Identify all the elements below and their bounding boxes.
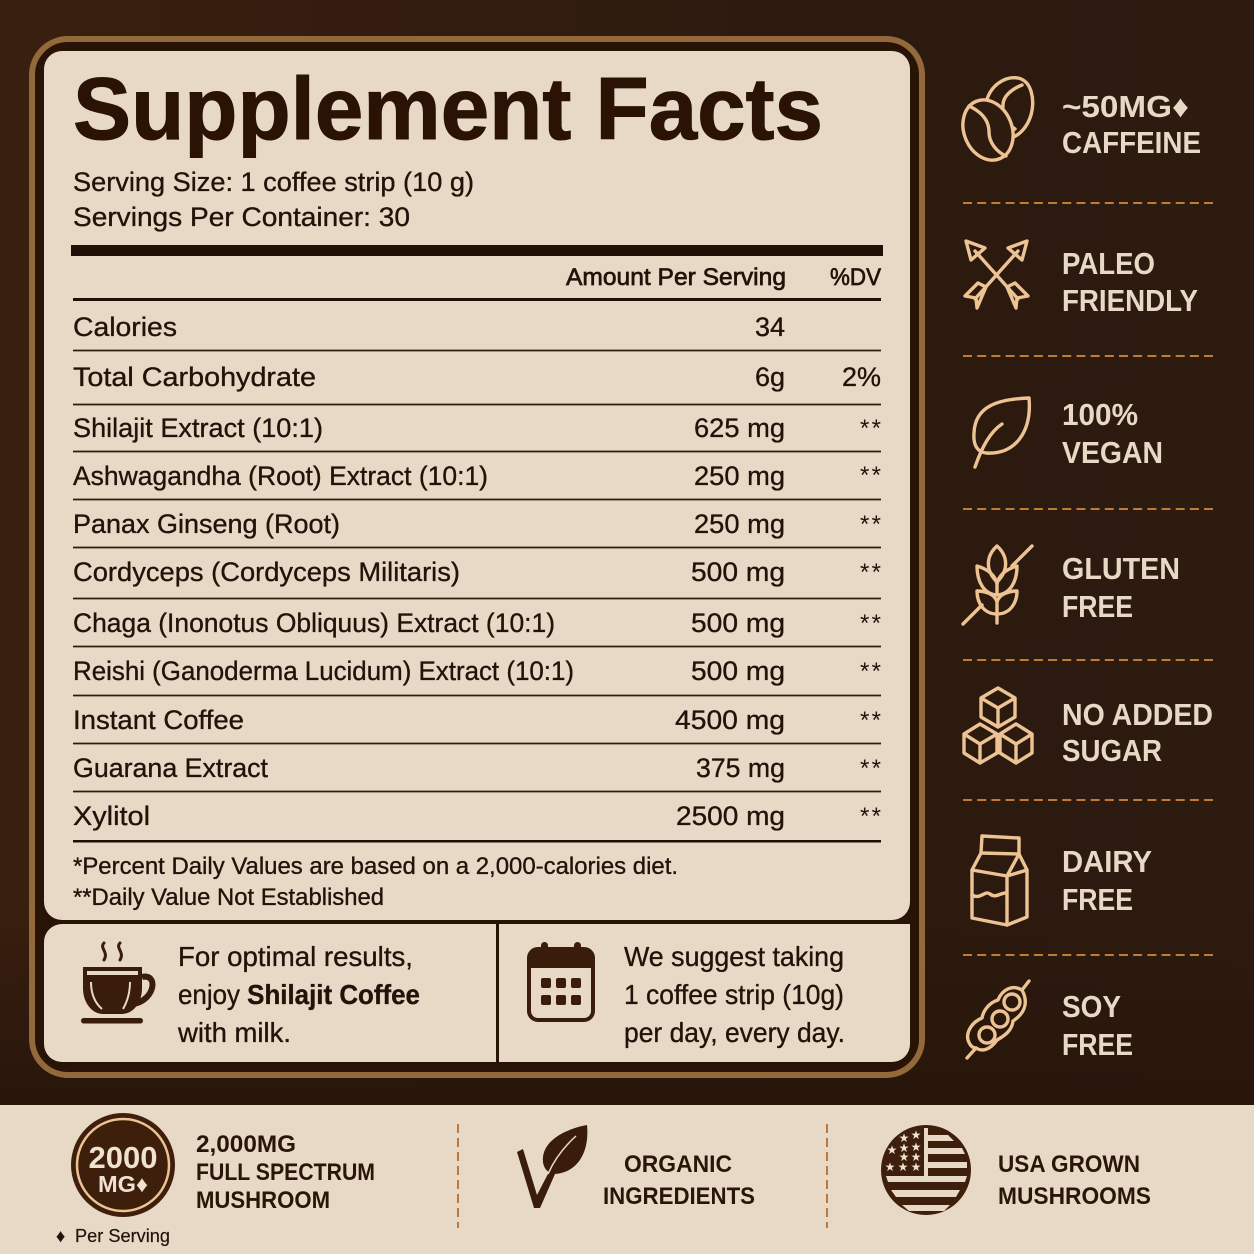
icon: usa flag circle: ★	[899, 1150, 909, 1164]
row: panax ginseng: Panax Ginseng (Root)	[73, 509, 340, 539]
icon: usa flag circle: ★	[911, 1150, 921, 1164]
label: DAIRY	[1062, 844, 1152, 879]
tip text: 1 coffee strip (10g)	[624, 979, 844, 1010]
panel: supplement facts frame	[32, 39, 922, 1075]
icon: sugar cubes	[964, 688, 1032, 763]
serving information: Serving Size: 1 coffee strip (10 g)	[73, 167, 474, 197]
row: xylitol	[73, 801, 881, 842]
serving information: Servings Per Container: 30	[73, 202, 410, 232]
row: calories: 34	[755, 312, 785, 342]
tip text: enjoy Shilajit Coffee	[178, 979, 420, 1010]
badge: 2000 mg mushroom: FULL SPECTRUM	[196, 1159, 375, 1186]
benefit: vegan: VEGAN	[1062, 435, 1163, 470]
icon: usa flag circle: ★	[911, 1160, 921, 1174]
row: instant coffee: **	[860, 707, 881, 734]
row: chaga: **	[860, 610, 881, 637]
dashed separators	[458, 1124, 827, 1228]
badge: organic ingredients	[517, 1125, 755, 1210]
row: total carbohydrate: Total Carbohydrate	[73, 362, 316, 392]
icon: usa flag circle: ★	[898, 1160, 908, 1174]
row: panax ginseng: **	[860, 511, 881, 538]
tip text	[177, 941, 420, 1048]
label: 100%	[1062, 397, 1138, 432]
benefit: no added sugar	[964, 688, 1213, 768]
thick divider bar	[71, 245, 883, 256]
row: shilajit	[73, 413, 881, 452]
row: reishi: Reishi (Ganoderma Lucidum) Extract (10:1)	[73, 656, 574, 686]
label: GLUTEN	[1062, 551, 1180, 586]
benefit: soy free	[967, 981, 1133, 1062]
benefit: soy free: FREE	[1062, 1027, 1133, 1062]
row: chaga: 500 mg	[691, 608, 785, 638]
footnotes: **Daily Value Not Established	[73, 884, 384, 911]
panel: facts table background	[44, 51, 910, 920]
icon: wheat crossed out	[963, 546, 1032, 624]
benefit: vegan	[974, 397, 1163, 470]
row: reishi: **	[860, 658, 881, 685]
label: PALEO	[1062, 246, 1155, 281]
tip text	[624, 941, 845, 1048]
row: total carbohydrate	[73, 362, 881, 404]
tip text: We suggest taking	[624, 941, 844, 972]
row: calories	[73, 312, 881, 350]
icon: 2000 mg seal: 2000	[88, 1140, 158, 1175]
icon: milk carton	[972, 836, 1027, 925]
row: panax ginseng	[73, 509, 881, 548]
icon: soy pod	[967, 981, 1029, 1058]
row: cordyceps: **	[860, 559, 881, 586]
icon: usa flag circle: ★	[911, 1128, 921, 1142]
per serving note: ♦	[56, 1226, 65, 1246]
icon: coffee cup	[81, 943, 152, 1024]
row: cordyceps: Cordyceps (Cordyceps Militaris)	[73, 557, 460, 587]
icon: calendar	[529, 942, 593, 1020]
table header: %DV	[830, 264, 881, 291]
benefit: paleo friendly	[965, 241, 1198, 318]
benefit: dairy free: FREE	[1062, 882, 1133, 917]
row: xylitol: Xylitol	[73, 801, 150, 831]
table header: Amount Per Serving	[566, 264, 786, 291]
icon: usa flag circle: ★	[899, 1131, 909, 1145]
tip text: per day, every day.	[624, 1017, 845, 1048]
badge: usa grown	[881, 1125, 1151, 1215]
row: ashwagandha: 250 mg	[694, 461, 785, 491]
tip text: For optimal results,	[178, 941, 413, 972]
benefit: paleo friendly: FRIENDLY	[1062, 283, 1198, 318]
icon: usa flag circle: ★	[911, 1140, 921, 1154]
serving information	[73, 167, 474, 232]
nutrition rows	[73, 312, 881, 842]
row: shilajit: **	[860, 415, 881, 442]
badge: 2000 mg mushroom: MUSHROOM	[196, 1187, 330, 1214]
benefit: gluten free: FREE	[1062, 589, 1133, 624]
row: instant coffee: Instant Coffee	[73, 705, 244, 735]
row: total carbohydrate: 2%	[842, 362, 881, 392]
row: calories: Calories	[73, 312, 177, 342]
icon: usa flag circle	[881, 1125, 971, 1215]
row: reishi	[73, 656, 881, 696]
row: chaga: Chaga (Inonotus Obliquus) Extract (10:1)	[73, 608, 555, 638]
benefit: caffeine: CAFFEINE	[1062, 125, 1201, 160]
icon: coffee beans	[954, 78, 1033, 168]
icon: usa flag circle: ★	[887, 1143, 897, 1157]
row: reishi: 500 mg	[691, 656, 785, 686]
panel: bottom badges band	[0, 1105, 1254, 1254]
row: instant coffee: 4500 mg	[675, 705, 785, 735]
row: guarana: **	[860, 755, 881, 782]
tip text: with milk.	[177, 1017, 291, 1048]
label: SOY	[1062, 989, 1121, 1024]
icon: 2000 mg seal: MG♦	[98, 1171, 148, 1197]
badge: 2000 mg mushroom	[56, 1113, 375, 1246]
label: USA GROWN	[998, 1151, 1140, 1178]
icon: usa flag circle: ★	[899, 1141, 909, 1155]
row: panax ginseng: 250 mg	[694, 509, 785, 539]
benefit: gluten free	[963, 546, 1180, 624]
icon: 2000 mg seal	[71, 1113, 175, 1217]
footnotes	[73, 853, 678, 911]
row: shilajit: Shilajit Extract (10:1)	[73, 413, 323, 443]
row: ashwagandha: Ashwagandha (Root) Extract (10:1)	[73, 461, 488, 491]
footnotes: *Percent Daily Values are based on a 2,000-calories diet.	[73, 853, 678, 880]
dashed dividers	[963, 203, 1213, 955]
panel: daily use tip	[499, 924, 910, 1062]
row: ashwagandha	[73, 461, 881, 500]
row: total carbohydrate: 6g	[755, 362, 785, 392]
label: ~50MG♦	[1062, 89, 1189, 124]
panel: milk tip	[44, 924, 496, 1062]
benefit: no added sugar: SUGAR	[1062, 733, 1162, 768]
row: xylitol: 2500 mg	[676, 801, 785, 831]
row: guarana: 375 mg	[696, 753, 785, 783]
label: ORGANIC	[624, 1151, 732, 1178]
benefit: caffeine	[954, 78, 1201, 168]
row: shilajit: 625 mg	[694, 413, 785, 443]
row: cordyceps: 500 mg	[691, 557, 785, 587]
badge: organic ingredients: INGREDIENTS	[603, 1183, 755, 1210]
icon: usa flag circle: ★	[885, 1160, 895, 1174]
badge: usa grown: MUSHROOMS	[998, 1183, 1151, 1210]
benefit: dairy free	[972, 836, 1152, 925]
per serving note: Per Serving	[75, 1226, 170, 1246]
row: chaga	[73, 608, 881, 646]
row: guarana	[73, 753, 881, 792]
row: guarana: Guarana Extract	[73, 753, 268, 783]
row: instant coffee	[73, 705, 881, 744]
row: ashwagandha: **	[860, 462, 881, 489]
label: 2,000MG	[196, 1131, 296, 1158]
icon: v with leaf	[517, 1125, 587, 1208]
row: xylitol: **	[860, 803, 881, 830]
table header	[73, 264, 881, 301]
title: Supplement Facts	[73, 59, 823, 158]
label: NO ADDED	[1062, 697, 1213, 732]
row: cordyceps	[73, 557, 881, 598]
icon: crossed arrows	[965, 241, 1028, 308]
icon: leaf	[974, 398, 1029, 467]
